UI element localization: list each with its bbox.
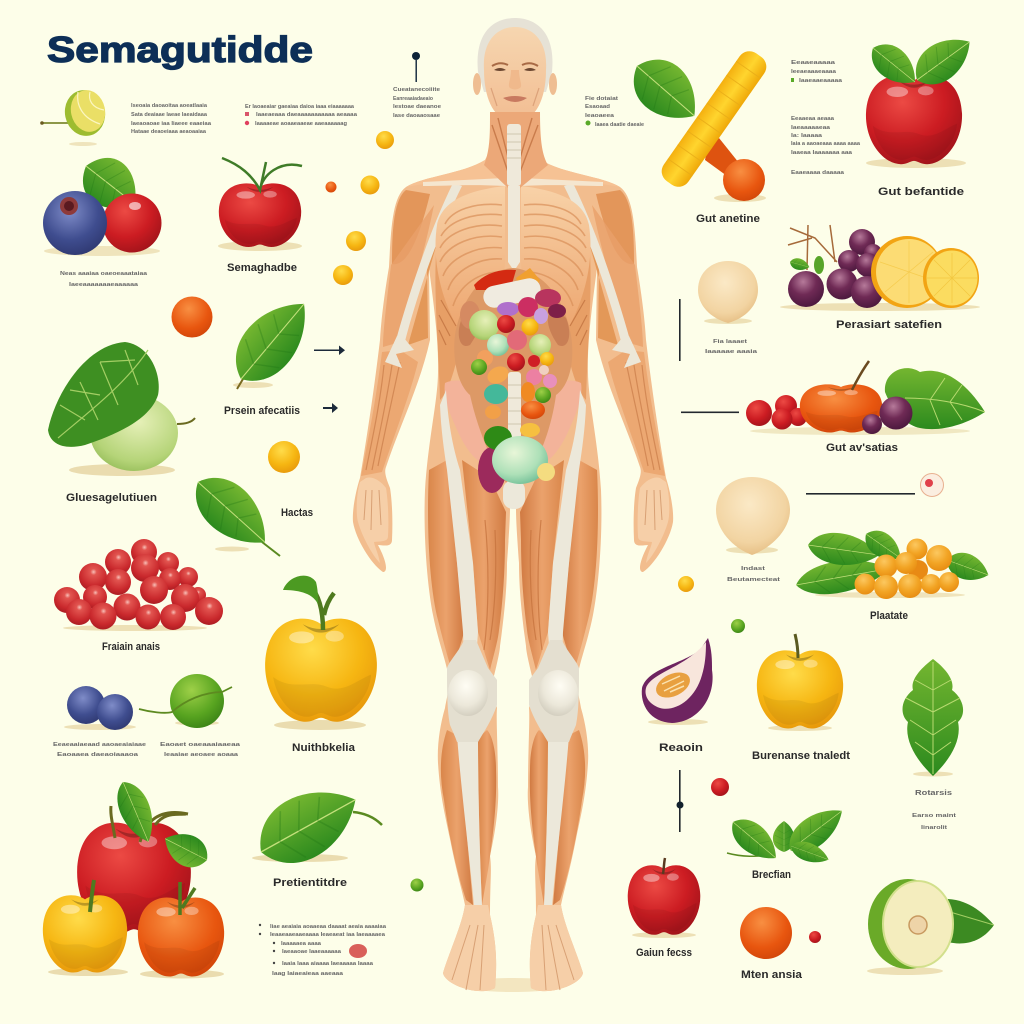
icon: halved fig xyxy=(642,638,713,725)
text block: top right of head xyxy=(585,96,644,128)
head xyxy=(473,18,557,122)
text block: top left 2: Iaaaaeae aoaaeaaeae aaeaaaaaag xyxy=(255,121,348,127)
text block: top centre: Cueatanecoiiite xyxy=(393,87,440,93)
icon: blueberry and apple xyxy=(43,146,162,256)
icon: cut lime with leaf xyxy=(867,879,994,975)
text block: bottom list: Ieaaeaaeaaeaaaa Ieaeaeat iaa Iaeaaaaea xyxy=(270,932,386,938)
text: green fruit caption: Eaoaet oaeaaaiaaeaa xyxy=(160,742,241,748)
label: leaf sprig: Brecfian xyxy=(752,869,791,881)
text block: right middle: Iaia a aaoaeaaa aaaa aaaa xyxy=(791,141,861,147)
text block: right middle: Ia: Iaaaaa xyxy=(791,133,823,139)
text block: top centre: Iase daoaaosaae xyxy=(393,113,440,119)
text: cream fruit caption: Beutamecteat xyxy=(727,577,780,583)
abdominal cavity xyxy=(454,268,572,490)
label: leaf: Hactas xyxy=(281,507,313,519)
icon: red berries xyxy=(54,539,223,631)
text block: bottom list: Iiae aeaiaia aoaaeaa daaaat aeaia aaaaiaa xyxy=(270,924,387,930)
text block: right middle: Eaaeaaaa daaaaa xyxy=(791,170,845,176)
text block: right middle: Iaeaaaaaeaa xyxy=(791,125,831,131)
text: blueberry caption xyxy=(53,742,146,758)
icon: green fruit with stem xyxy=(139,674,232,728)
label: yellow apple: Burenanse tnaledt xyxy=(752,750,850,762)
icon: green leaf xyxy=(220,287,324,395)
icon: cream fruit xyxy=(698,261,758,324)
figure: human anatomy xyxy=(353,18,673,992)
icon: lime half xyxy=(40,86,109,146)
text block: top right of head: Ieaoaeea xyxy=(585,113,615,119)
text block: right upper: Eeaaeaaaaa xyxy=(791,60,836,66)
text block: right middle: Eeaaeaa aeaaa xyxy=(791,116,835,122)
text block: bottom list xyxy=(259,924,387,977)
text: cream fruit caption: Indast xyxy=(741,566,765,572)
label: yellow apple: Nuithbkelia xyxy=(292,742,356,754)
text block: top right of head: Esaoaad xyxy=(585,104,611,110)
text block: top left 2: Iaaeaeaaa daeaaaaaaaaaaa aeaaaa xyxy=(256,112,358,118)
connector line xyxy=(679,299,681,361)
icon: leaf pointing down xyxy=(182,464,282,560)
icon: orange cluster with leaves xyxy=(793,524,993,600)
icon: tomato, berries and leaf xyxy=(746,361,985,435)
icon: yellow apple xyxy=(757,634,843,731)
text block: bottom list: Iaaaaaea aaaa xyxy=(281,941,322,947)
text: blueberry caption: Iaeeaaaaaaaeaaaaaa xyxy=(69,282,139,288)
text block: right middle: Iaaeaa Iaaaaaaa aaa xyxy=(791,150,853,156)
icon: yellow rod with leaf and orange xyxy=(621,46,771,202)
text: cream fruit caption xyxy=(705,339,758,355)
icon: tall leaf xyxy=(903,659,963,776)
text: tall leaf caption: Earso maint xyxy=(912,813,956,819)
icon: grapes and citrus xyxy=(780,225,980,311)
connector: head pin xyxy=(412,52,420,82)
decorative dots xyxy=(678,576,821,943)
text: blueberry caption: Neas aaaiaa oaeoeaaataiaa xyxy=(60,271,148,277)
text: green fruit caption xyxy=(160,742,241,758)
label: small red apple: Gaiun fecss xyxy=(636,947,692,959)
icon: leaf sprig xyxy=(724,799,851,869)
text block: top centre: Eanreaaiadaeaio xyxy=(393,96,434,102)
icon: large green fruit xyxy=(48,342,195,476)
label: leaf: Prsein afecatiis xyxy=(224,405,300,417)
text: cream fruit caption: Fia laaaet xyxy=(713,339,747,345)
text block: top left 2: Er Iaoaeaiar gaeaiaa daioa iaaa eiaaaaaaa xyxy=(245,104,355,110)
label: long leaf: Pretientitdre xyxy=(273,877,347,889)
connector line xyxy=(806,493,915,495)
organs xyxy=(460,268,566,509)
text: tall leaf caption: Rotarsis xyxy=(915,790,952,797)
icon: yellow apple with leaf xyxy=(265,576,377,730)
icon: large cream fruit xyxy=(716,477,790,555)
label: fig: Reaoin xyxy=(659,742,703,754)
icon: big red apple with leaves xyxy=(863,26,980,168)
text block: top centre: Iestoae daeanoe xyxy=(393,104,441,110)
text: blueberry caption: Eeaeaaiaeaad aaoaeaiaiaae xyxy=(53,742,146,748)
connector line xyxy=(681,412,739,413)
label: grapes: Perasiart satefien xyxy=(836,319,942,331)
icon: orange xyxy=(740,907,792,959)
text: blueberry caption: Eaoaaea daeaoiaaaoa xyxy=(57,752,139,758)
text block: bottom list: Iaeaaoae Iaaeaaaaaa xyxy=(282,949,342,955)
text block: top left 1: Sata deaiaae laeae laeaidaaa xyxy=(131,112,208,118)
text block: right upper: Iaaeaaeaaaaa xyxy=(799,78,843,84)
text: blueberry caption xyxy=(60,271,148,288)
text block: top right of head: Fie dotaiat xyxy=(585,96,618,102)
label: rod: Gut anetine xyxy=(696,213,760,225)
text block: top centre xyxy=(393,87,441,119)
icon: blueberries xyxy=(64,686,136,730)
text block: right upper xyxy=(791,60,843,84)
decorative dots: yellow and orange xyxy=(326,131,394,285)
neck and spine xyxy=(484,112,548,188)
text block: bottom list: Iaaia Iaaa aiaaaa Iaeaaaaa Iaaaa xyxy=(282,961,374,967)
connector: line with dot xyxy=(676,770,684,832)
text: cream fruit caption: Iaaaaae aaaia xyxy=(705,349,758,355)
icon: long leaf xyxy=(245,771,382,879)
title: Semagutidde xyxy=(47,29,313,70)
text block: top left 1: Iseoaia daoaoitaa aoeatlaaia xyxy=(131,103,208,109)
arrow xyxy=(314,346,345,355)
text: tall leaf caption: Iinarolit xyxy=(921,825,947,831)
label: orange cluster: Plaatate xyxy=(870,610,908,622)
text block: right upper: Ieeaeaaaeaaaa xyxy=(791,69,837,75)
label: tomato: Gut av'satias xyxy=(826,442,898,454)
icon: apple trio xyxy=(43,776,224,978)
label: big apple: Gut befantide xyxy=(878,186,964,198)
text block: top left 1: Iaeaoaoae iaa Iiaeee eaaeiaa xyxy=(131,121,212,127)
icon: green dot xyxy=(410,878,424,892)
label: orange: Mten ansia xyxy=(741,969,803,981)
sternum xyxy=(508,186,520,268)
text block: top left 1 xyxy=(131,103,212,135)
label: green fruit: Gluesagelutiuen xyxy=(66,492,157,504)
label: apple: Semaghadbe xyxy=(227,262,297,274)
text: cream fruit caption xyxy=(727,566,780,583)
text: tall leaf caption xyxy=(912,790,956,831)
label: berries: Fraiain anais xyxy=(102,641,160,653)
icon: small marker fruit xyxy=(920,474,944,496)
text block: top left 2 xyxy=(245,104,358,127)
icon: orange xyxy=(172,296,212,338)
icon: small red apple xyxy=(628,858,700,938)
text: green fruit caption: Ieaaiae aeoaee aoaaa xyxy=(164,752,239,758)
text block: top right of head: Iaaea daatie daeaie xyxy=(595,122,644,128)
text block: top left 1: Hataae deaoeiaaa aeaoaaiaa xyxy=(131,129,207,135)
icon: red apple with stems xyxy=(218,158,302,251)
arrow xyxy=(323,403,338,413)
text block: bottom list: Iaag Iaiaeaieaa aaeaaa xyxy=(272,971,344,977)
text block: right middle xyxy=(791,116,861,176)
icon: yellow dot xyxy=(268,441,300,473)
